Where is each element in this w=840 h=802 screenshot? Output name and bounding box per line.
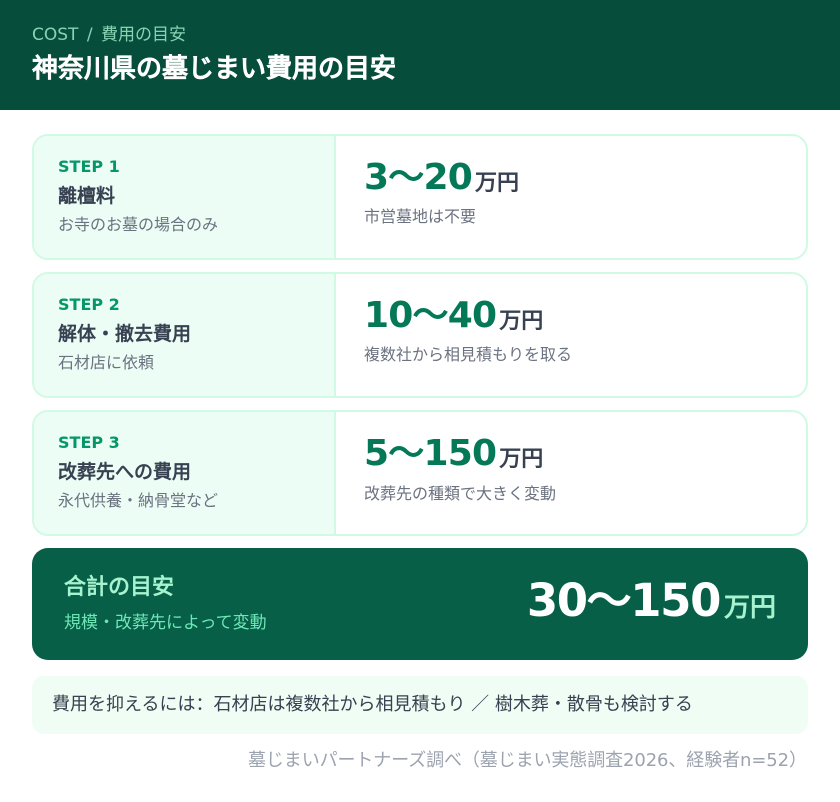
tip text: 費用を抑えるには：石材店は複数社から相見積もり ／ 樹木葬・散骨も検討する: [52, 694, 693, 715]
step 3 name: 改葬先への費用: [58, 461, 191, 483]
panel: step 1: [32, 134, 808, 260]
header eyebrow: COST / 費用の目安: [32, 25, 186, 45]
total cost: 30〜150万円: [527, 574, 776, 627]
step 2 name: 解体・撤去費用: [58, 323, 191, 345]
panel: step 2: [32, 272, 808, 398]
tip box: [32, 676, 808, 734]
step 1 tag: STEP 1: [58, 157, 120, 176]
step 2 cost: 10〜40万円: [364, 295, 543, 336]
total label: 合計の目安: [64, 575, 174, 600]
step 3 note: 改葬先の種類で大きく変動: [364, 484, 556, 503]
step 3 description: 永代供養・納骨堂など: [58, 491, 218, 510]
step 3 cost: 5〜150万円: [364, 433, 543, 474]
total description: 規模・改葬先によって変動: [64, 613, 267, 633]
step 1 cost: 3〜20万円: [364, 157, 519, 198]
step 2 label panel: [34, 274, 336, 396]
step 2 description: 石材店に依頼: [58, 353, 154, 372]
panel: total: [32, 548, 808, 660]
title: 神奈川県の墓じまい費用の目安: [32, 54, 396, 84]
step 1 name: 離檀料: [58, 185, 115, 207]
step 1 note: 市営墓地は不要: [364, 207, 476, 226]
step 2 tag: STEP 2: [58, 295, 120, 314]
panel: step 3: [32, 410, 808, 536]
step 3 label panel: [34, 412, 336, 534]
step 2 note: 複数社から相見積もりを取る: [364, 345, 572, 364]
step 1 label panel: [34, 136, 336, 258]
step 1 description: お寺のお墓の場合のみ: [58, 215, 218, 234]
source note: 墓じまいパートナーズ調べ（墓じまい実態調査2026、経験者n=52）: [248, 750, 807, 771]
step 3 tag: STEP 3: [58, 433, 120, 452]
header band: [0, 0, 840, 110]
